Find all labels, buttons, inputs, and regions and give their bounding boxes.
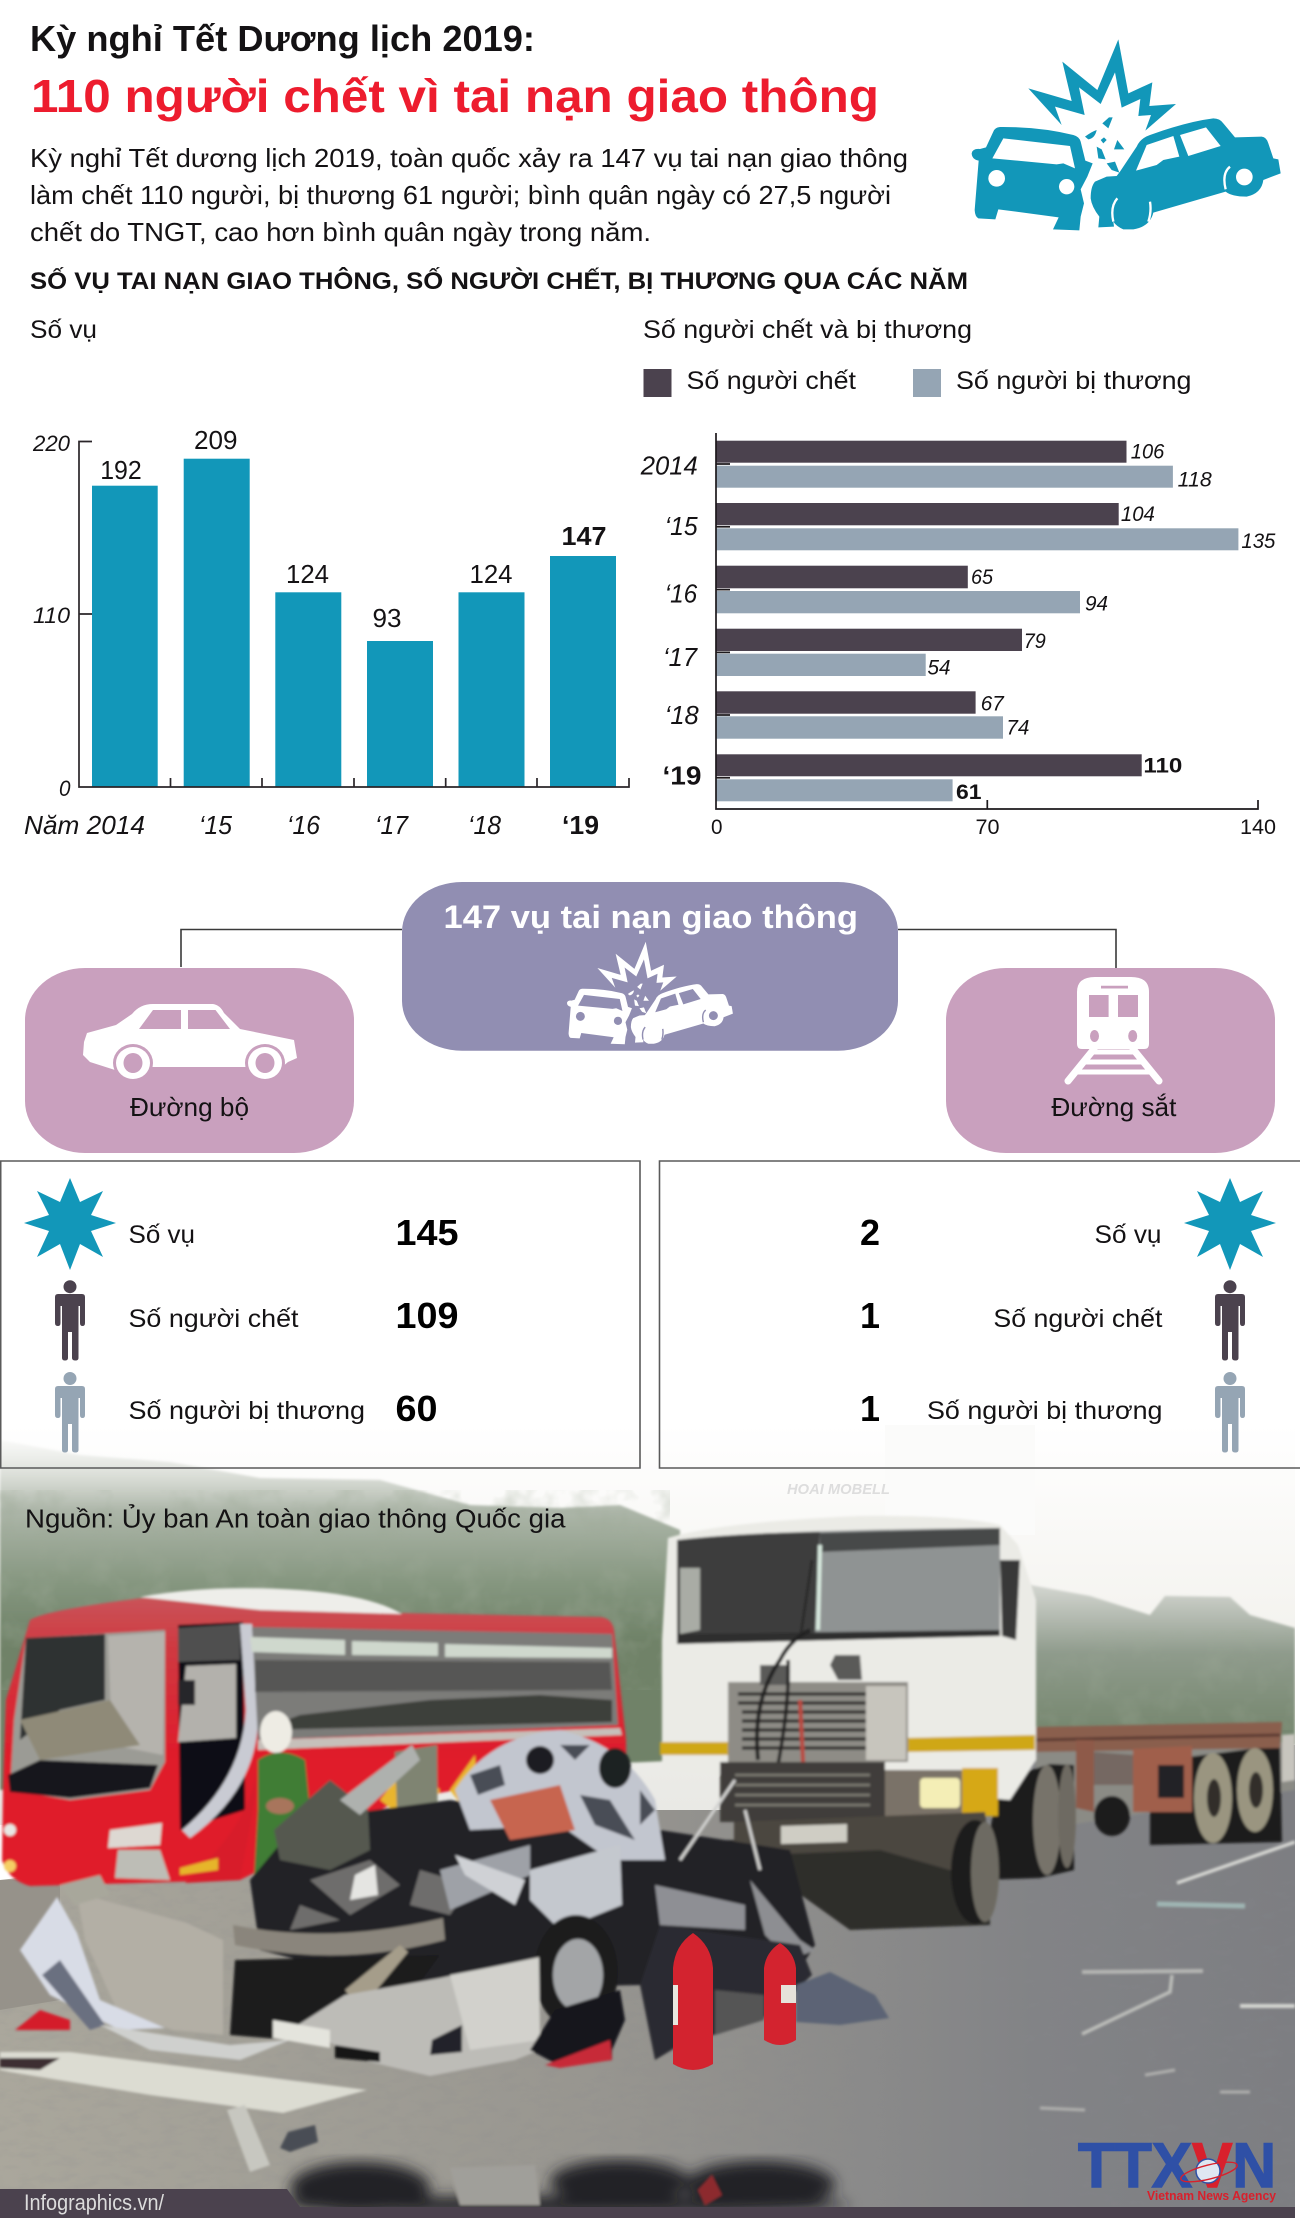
- bus windshield: [10, 1630, 165, 1800]
- icon: star: [24, 1178, 116, 1270]
- panel: railway statistics: 2: [860, 1212, 880, 1253]
- bar chart: deaths and injuries: 74: [1006, 717, 1029, 740]
- bar chart: deaths and injuries: 106: [1131, 441, 1165, 464]
- wreck: crumpled silver hood: [455, 1730, 665, 1860]
- bar chart: number of accidents: 0: [59, 776, 71, 801]
- bar chart: number of accidents: 209: [194, 425, 238, 455]
- intro paragraph: chết do TNGT, cao hơn bình quân ngày trong năm.: [30, 217, 651, 247]
- bar chart: deaths and injuries: 65: [971, 566, 993, 589]
- truck bumper: [734, 1812, 992, 1872]
- bar chart: number of accidents: 124: [470, 559, 512, 589]
- wreck: silver bits: [440, 1845, 530, 1910]
- wreck: folded panel: [77, 1893, 223, 2035]
- trailer: [1036, 1742, 1295, 1830]
- truck cab: [662, 1516, 1036, 1800]
- truck lower grille: [720, 1762, 885, 1822]
- red fire extinguishers: [673, 1933, 796, 2070]
- panel: road statistics: 145: [396, 1212, 458, 1253]
- intro paragraph: làm chết 110 người, bị thương 61 người; bình quân ngày có 27,5 người: [30, 180, 891, 210]
- panel: railway statistics: 1: [860, 1388, 880, 1429]
- legend: [644, 367, 1192, 397]
- truck front wheel: [950, 1819, 982, 1924]
- icon: car crash: [972, 39, 1281, 230]
- icon: person light right: [1215, 1372, 1245, 1452]
- title line 1: Kỳ nghỉ Tết Dương lịch 2019:: [30, 18, 535, 59]
- chart subtitle: accidents: Số vụ: [30, 316, 97, 344]
- shoe: [280, 2125, 318, 2152]
- bar chart: deaths and injuries: 2014: [640, 451, 698, 481]
- officer: [260, 1711, 292, 1753]
- second figure: [393, 1744, 440, 1810]
- bar chart: deaths and injuries: 0: [711, 816, 722, 839]
- blue cloth: [796, 1972, 889, 2025]
- wreck: number plate: [273, 2020, 330, 2048]
- bar chart: deaths and injuries: 54: [928, 657, 950, 680]
- legend: Số người chết: [686, 367, 856, 395]
- panel: railway statistics: [660, 1161, 1300, 1468]
- bar chart: deaths and injuries: 135: [1241, 530, 1276, 553]
- panel: railway statistics: Số người bị thương: [927, 1397, 1162, 1425]
- bar chart: number of accidents: ‘18: [468, 810, 502, 840]
- bar chart: number of accidents: 220: [32, 431, 71, 456]
- bar chart: deaths and injuries: 61: [956, 781, 982, 804]
- footer bar with site name: Infographics.vn/: [24, 2190, 165, 2215]
- oil stain: [270, 2160, 850, 2214]
- bus door: [178, 1622, 245, 1830]
- wreck: silver front bumper: [290, 1957, 540, 2076]
- TTXVN logo: TTXVN: [1078, 2131, 1276, 2201]
- panel: railway statistics: Số người chết: [993, 1305, 1162, 1333]
- connector lines: [181, 930, 1116, 968]
- bar chart: number of accidents: 147: [562, 521, 606, 551]
- truck rear wheels: [980, 1764, 1074, 1880]
- bar chart: number of accidents: 93: [372, 603, 402, 633]
- intro paragraph: [30, 143, 908, 247]
- chart subtitle: deaths and injuries: Số người chết và bị thương: [643, 316, 972, 344]
- wreck: grey folded hood: [274, 1780, 370, 1870]
- shadow under truck: [725, 1840, 990, 1930]
- panel: road statistics: Số người bị thương: [128, 1397, 365, 1425]
- bar chart: number of accidents: 124: [286, 559, 329, 589]
- bar chart: deaths and injuries: 79: [1024, 630, 1046, 653]
- panel: road statistics: 60: [396, 1388, 438, 1429]
- bar chart: deaths and injuries: ‘19: [662, 760, 702, 790]
- wreck: fog lamp recess: [430, 2025, 462, 2055]
- bus: [2, 1597, 626, 1886]
- bar chart: deaths and injuries: ‘17: [663, 642, 699, 672]
- footer bar with site name: [0, 2189, 1295, 2218]
- bar chart: deaths and injuries: 104: [1121, 503, 1155, 526]
- bus side windows: [252, 1627, 618, 1740]
- bar chart: number of accidents: Năm 2014: [24, 810, 145, 840]
- panel: road statistics: Số vụ: [128, 1221, 195, 1249]
- bar chart: deaths and injuries: 140: [1240, 816, 1276, 839]
- photo: crash scene with bus, truck and wrecked car: [0, 1425, 1295, 2214]
- title line 2: 110 người chết vì tai nạn giao thông: [31, 70, 879, 122]
- truck headlight: [920, 1778, 960, 1808]
- panel: railway statistics: 1: [860, 1295, 880, 1336]
- wreck: bumper bar: [233, 1918, 445, 1955]
- panel: railway: Đường sắt: [1051, 1092, 1177, 1122]
- icon: train: [1068, 977, 1159, 1081]
- wreck: dark mass: [250, 1800, 815, 1990]
- wreck: crumpled silver left: [20, 1897, 165, 2030]
- source note: Nguồn: Ủy ban An toàn giao thông Quốc gia: [25, 1504, 566, 1534]
- bar chart: deaths and injuries: ‘18: [665, 700, 699, 730]
- panel: railway statistics: Số vụ: [1094, 1221, 1162, 1249]
- icon: car crash white: [567, 942, 733, 1044]
- bar chart: number of accidents: 192: [100, 455, 142, 485]
- bar chart: deaths and injuries: 118: [1178, 469, 1212, 492]
- wreck: medium grey debris: [290, 1860, 470, 1930]
- icon: car: [83, 1004, 297, 1082]
- faint lettering on truck: HOAI MOBELL: [787, 1481, 890, 1498]
- bar chart: deaths and injuries: 67: [981, 693, 1005, 716]
- panel: road: [25, 968, 354, 1153]
- bar chart: deaths and injuries: 70: [976, 816, 1000, 839]
- wreck: dark panel behind extinguishers: [640, 1925, 812, 2060]
- wreck: dark cloth: [530, 1990, 625, 2066]
- bar chart: deaths and injuries: 110: [1143, 754, 1182, 777]
- bar chart: number of accidents: [24, 425, 629, 840]
- bar chart: deaths and injuries: ‘16: [665, 579, 698, 609]
- intro paragraph: Kỳ nghỉ Tết dương lịch 2019, toàn quốc xảy ra 147 vụ tai nạn giao thông: [30, 143, 908, 173]
- truck grille: [728, 1682, 908, 1762]
- road markings: [1040, 1842, 1295, 2110]
- bar chart: number of accidents: ‘19: [562, 810, 599, 840]
- bar chart: deaths and injuries: ‘15: [665, 511, 698, 541]
- icon: person light: [55, 1372, 85, 1452]
- icon: person dark: [55, 1280, 85, 1360]
- section heading: SỐ VỤ TAI NẠN GIAO THÔNG, SỐ NGƯỜI CHẾT, BỊ THƯƠNG QUA CÁC NĂM: [30, 267, 968, 295]
- panel: road statistics: [1, 1161, 640, 1468]
- bar chart: number of accidents: ‘15: [199, 810, 233, 840]
- bar chart: number of accidents: ‘16: [287, 810, 321, 840]
- panel: railway: [946, 968, 1275, 1153]
- panel: 147 accidents: 147 vụ tai nạn giao thông: [444, 899, 858, 935]
- licence plate: [781, 1824, 847, 1844]
- bar chart: deaths and injuries: [640, 433, 1276, 839]
- panel: road: Đường bộ: [130, 1092, 249, 1122]
- bar chart: deaths and injuries: 94: [1085, 593, 1108, 616]
- icon: person dark right: [1215, 1280, 1245, 1360]
- wreck: flat debris sheet: [0, 2052, 367, 2113]
- icon: star right: [1184, 1178, 1276, 1270]
- bar chart: number of accidents: ‘17: [375, 810, 409, 840]
- truck yellow box: [962, 1768, 998, 1816]
- wreck: wheel: [537, 1914, 618, 2018]
- TTXVN logo: Vietnam News Agency: [1147, 2189, 1276, 2203]
- legend: Số người bị thương: [956, 367, 1192, 395]
- panel: 147 accidents: [402, 882, 898, 1051]
- bar chart: number of accidents: 110: [33, 603, 71, 628]
- panel: road statistics: 109: [396, 1295, 458, 1336]
- panel: road statistics: Số người chết: [128, 1305, 299, 1333]
- road: [0, 1745, 1295, 2210]
